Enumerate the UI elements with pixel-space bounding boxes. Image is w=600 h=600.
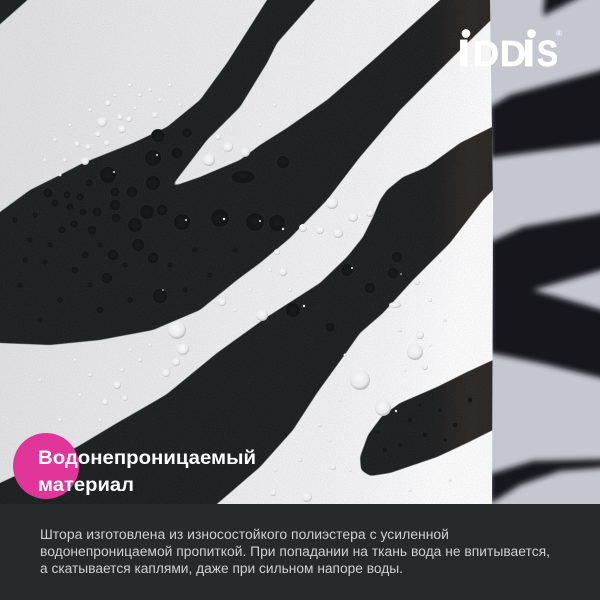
brand logo: IDDIS: D — [473, 33, 499, 74]
description text — [40, 527, 550, 576]
zebra stripes — [0, 0, 520, 525]
brand logo: IDDIS: i — [522, 23, 536, 77]
fabric weave texture — [0, 0, 492, 504]
brand logo: IDDIS — [460, 29, 562, 67]
brand logo: IDDIS: ® — [556, 29, 562, 38]
curtain fabric — [0, 0, 493, 504]
dark description panel — [0, 504, 600, 600]
water drop highlights — [113, 154, 402, 412]
pink circle accent — [13, 433, 79, 499]
brand logo: IDDIS: D — [500, 33, 526, 74]
description text: водонепроницаемой пропиткой. При попадании на ткань вода не впитывается, — [40, 544, 550, 559]
water drops on white stripes — [38, 83, 452, 502]
description text: Штора изготовлена из износостойкого полиэстера с усиленной — [40, 527, 449, 542]
description text: а скатывается каплями, даже при сильном напоре воды. — [40, 561, 403, 576]
water drops on dark stripes — [12, 128, 472, 452]
heading: Водонепроницаемый — [38, 448, 256, 469]
blurred background curtain — [488, 0, 600, 504]
heading: материал — [38, 475, 134, 496]
brand logo: IDDIS: S — [537, 33, 558, 74]
brand logo: IDDIS: i — [457, 23, 471, 77]
heading — [38, 448, 256, 496]
